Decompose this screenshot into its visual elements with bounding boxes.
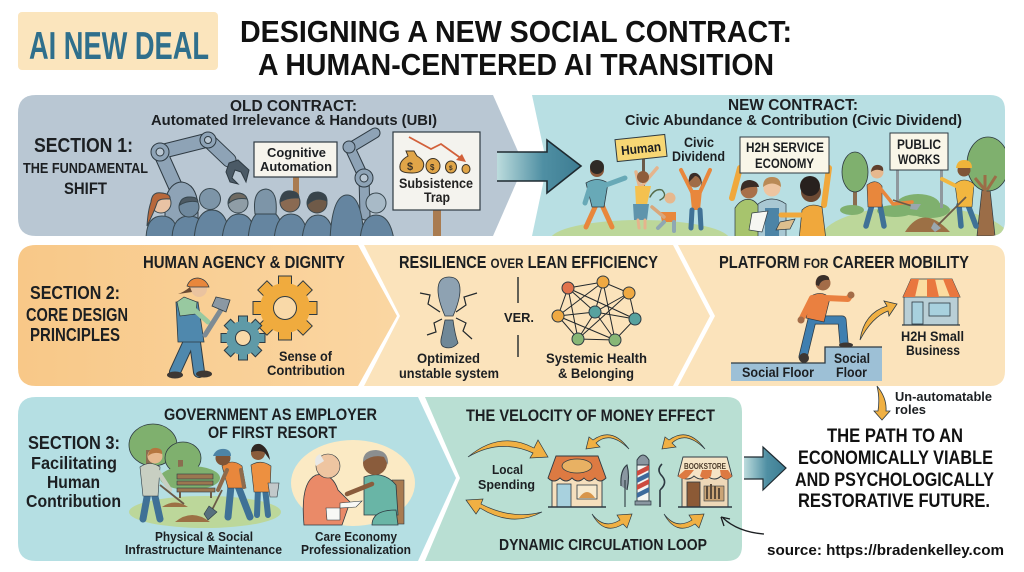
section 1 heading [23, 135, 148, 198]
panel: human agency and dignity [18, 245, 397, 386]
icon: climbing person [798, 275, 854, 363]
group: civic dividend people [585, 134, 725, 231]
caption: physical and social infrastructure [125, 529, 282, 557]
person left [585, 160, 625, 227]
caption: care economy: Professionalization [301, 542, 411, 557]
caption: optimized unstable system: unstable system [399, 366, 499, 381]
caption: sense of contribution: Contribution [267, 363, 345, 378]
section 2 heading: PRINCIPLES [30, 325, 120, 345]
label: un-automatable roles: roles [895, 403, 926, 417]
icon: unstable system [420, 277, 477, 348]
dirt piles [162, 502, 210, 522]
logo: AI New Deal: AI NEW DEAL [29, 25, 209, 68]
caption: systemic health [546, 351, 647, 381]
old contract heading: OLD CONTRACT: [230, 98, 357, 115]
source credit: source: https://bradenkelley.com [767, 542, 1004, 559]
heading: velocity of money: THE VELOCITY OF MONEY EFFECT [466, 406, 716, 425]
caption: H2H small business: H2H Small [901, 329, 964, 344]
section 3 heading [26, 432, 121, 511]
illustration: park workers [129, 424, 281, 528]
section 1 heading: SECTION 1: [34, 135, 133, 157]
title [240, 14, 792, 82]
illustration: care economy [291, 440, 415, 526]
versus divider: VER. [504, 310, 534, 325]
arrow: old to new contract [497, 140, 581, 193]
new contract heading [625, 97, 962, 129]
sign: H2H service economy: H2H SERVICE [746, 140, 824, 155]
icon: bakery [548, 456, 606, 507]
group: civic dividend people: Dividend [672, 149, 725, 164]
worker right [931, 160, 976, 232]
section 3 heading: Human [47, 472, 100, 492]
icon: robot arm left [151, 132, 249, 230]
sign: subsistence trap: Subsistence [399, 176, 473, 191]
arrow: down to un-automatable roles [874, 386, 890, 420]
arrow: to small business [860, 301, 897, 340]
logo: AI New Deal [18, 12, 218, 70]
sign: public works: PUBLIC [897, 137, 941, 152]
caption: sense of contribution [267, 349, 345, 378]
caption: H2H small business: Business [906, 343, 960, 358]
label: local spending [478, 462, 535, 492]
worker with shovel [140, 448, 184, 519]
worker left [866, 165, 921, 226]
trees [129, 424, 220, 490]
group: public works [840, 137, 1009, 236]
heading: government: OF FIRST RESORT [208, 423, 338, 442]
title: DESIGNING A NEW SOCIAL CONTRACT: [240, 14, 792, 49]
group: civic dividend people: Civic [684, 135, 714, 150]
person with sign [633, 168, 657, 228]
crowd of people [146, 188, 394, 240]
icon: steps: Social [834, 351, 870, 366]
sign: human: Human [620, 139, 662, 158]
tree left [840, 152, 868, 215]
conclusion text: THE PATH TO AN [827, 426, 963, 447]
caption: care economy [301, 529, 411, 557]
bushes [896, 194, 940, 216]
tree right [967, 137, 1009, 236]
label: un-automatable roles: Un-automatable [895, 390, 992, 404]
panel: resilience over lean efficiency [364, 245, 710, 386]
title: A HUMAN-CENTERED AI TRANSITION [258, 47, 774, 82]
worker with hard hat [204, 449, 250, 520]
dirt pile [905, 218, 950, 232]
sign: cognitive automation: Automation [260, 159, 332, 174]
icon: bookstore [678, 457, 732, 507]
sign: subsistence trap: Trap [424, 190, 450, 205]
sign: public works [890, 133, 948, 170]
section 2 heading: SECTION 2: [30, 283, 120, 303]
caption: H2H small business [901, 329, 964, 358]
heading: human agency: HUMAN AGENCY & DIGNITY [143, 252, 345, 272]
section 3 heading: Contribution [26, 491, 121, 511]
carer [347, 450, 404, 525]
sign: cognitive automation: Cognitive [267, 145, 326, 160]
sign: subsistence trap [393, 132, 480, 236]
label: un-automatable roles [895, 390, 992, 417]
worker with bucket [251, 444, 279, 515]
caption: optimized unstable system: Optimized [417, 351, 480, 366]
ground hills [552, 208, 1004, 236]
icon: steps: Floor [836, 365, 868, 380]
icon: money bags and falling arrow: $ [449, 165, 453, 172]
heading: government: GOVERNMENT AS EMPLOYER [164, 405, 377, 424]
heading: platform: PLATFORM FOR CAREER MOBILITY [719, 252, 969, 272]
old contract heading: Automated Irrelevance & Handouts (UBI) [151, 112, 437, 129]
conclusion text: ECONOMICALLY VIABLE [798, 448, 993, 469]
new contract heading: NEW CONTRACT: [728, 97, 858, 114]
label: local spending: Spending [478, 477, 535, 492]
bench [177, 474, 215, 498]
caption: sense of contribution: Sense of [279, 349, 332, 364]
sign: H2H service economy: ECONOMY [755, 156, 814, 171]
section 2 heading: CORE DESIGN [26, 305, 128, 325]
conclusion text: RESTORATIVE FUTURE. [798, 491, 990, 512]
new contract heading: Civic Abundance & Contribution (Civic Dividend) [625, 112, 962, 129]
section 3 heading: SECTION 3: [28, 432, 120, 453]
conclusion text: AND PSYCHOLOGICALLY [795, 470, 994, 491]
caption: optimized unstable system [399, 351, 499, 381]
caption: care economy: Care Economy [315, 529, 398, 544]
icon: storefront [902, 279, 960, 325]
section 1 heading: THE FUNDAMENTAL [23, 160, 148, 177]
icon: barber pole [621, 455, 665, 507]
icon: small gear [221, 316, 265, 360]
icon: steps: Social Floor [742, 365, 815, 380]
icon: steps [731, 347, 882, 381]
icon: money bags and falling arrow [400, 137, 470, 174]
panel: new contract [532, 95, 1005, 236]
elder [303, 454, 350, 525]
caption: physical and social infrastructure: Physical & Social [155, 529, 253, 544]
loop arrows [466, 435, 705, 528]
section 3 heading: Facilitating [31, 453, 117, 473]
icon: network [552, 276, 641, 346]
heading: resilience: RESILIENCE OVER LEAN EFFICIENCY [399, 252, 658, 272]
seated child with swirl [650, 190, 676, 231]
sign: H2H service economy [740, 137, 829, 173]
panel: velocity of money [425, 397, 742, 561]
label: local spending: Local [492, 462, 523, 477]
arrow: source pointer [721, 517, 764, 534]
caption: dynamic circulation loop: DYNAMIC CIRCULATION LOOP [499, 537, 707, 554]
panel: old contract [18, 95, 524, 240]
caption: physical and social infrastructure: Infrastructure Maintenance [125, 542, 282, 557]
section 1 heading: SHIFT [64, 179, 108, 198]
icon: bookstore: BOOKSTORE [684, 462, 727, 471]
icon: money bags and falling arrow: $ [407, 161, 413, 173]
conclusion text [795, 426, 994, 512]
comb and scissors [621, 465, 628, 507]
icon: worker with hammer [167, 278, 230, 378]
icon: money bags and falling arrow: $ [430, 163, 435, 172]
caption: systemic health: & Belonging [558, 366, 634, 381]
section 2 heading [26, 283, 128, 345]
sign: cognitive automation [254, 142, 337, 199]
arrow: to conclusion [744, 447, 786, 490]
panel: government as employer [18, 397, 456, 561]
heading: government [164, 405, 377, 442]
icon: robot arm right [343, 133, 375, 215]
group: H2H service economy [732, 168, 829, 240]
caption: systemic health: Systemic Health [546, 351, 647, 366]
person cheering [681, 170, 710, 228]
old contract heading [151, 98, 437, 129]
versus divider [504, 277, 534, 357]
icon: large gear [253, 276, 317, 340]
panel: platform for career mobility [678, 245, 1005, 386]
sign: public works: WORKS [898, 152, 940, 167]
